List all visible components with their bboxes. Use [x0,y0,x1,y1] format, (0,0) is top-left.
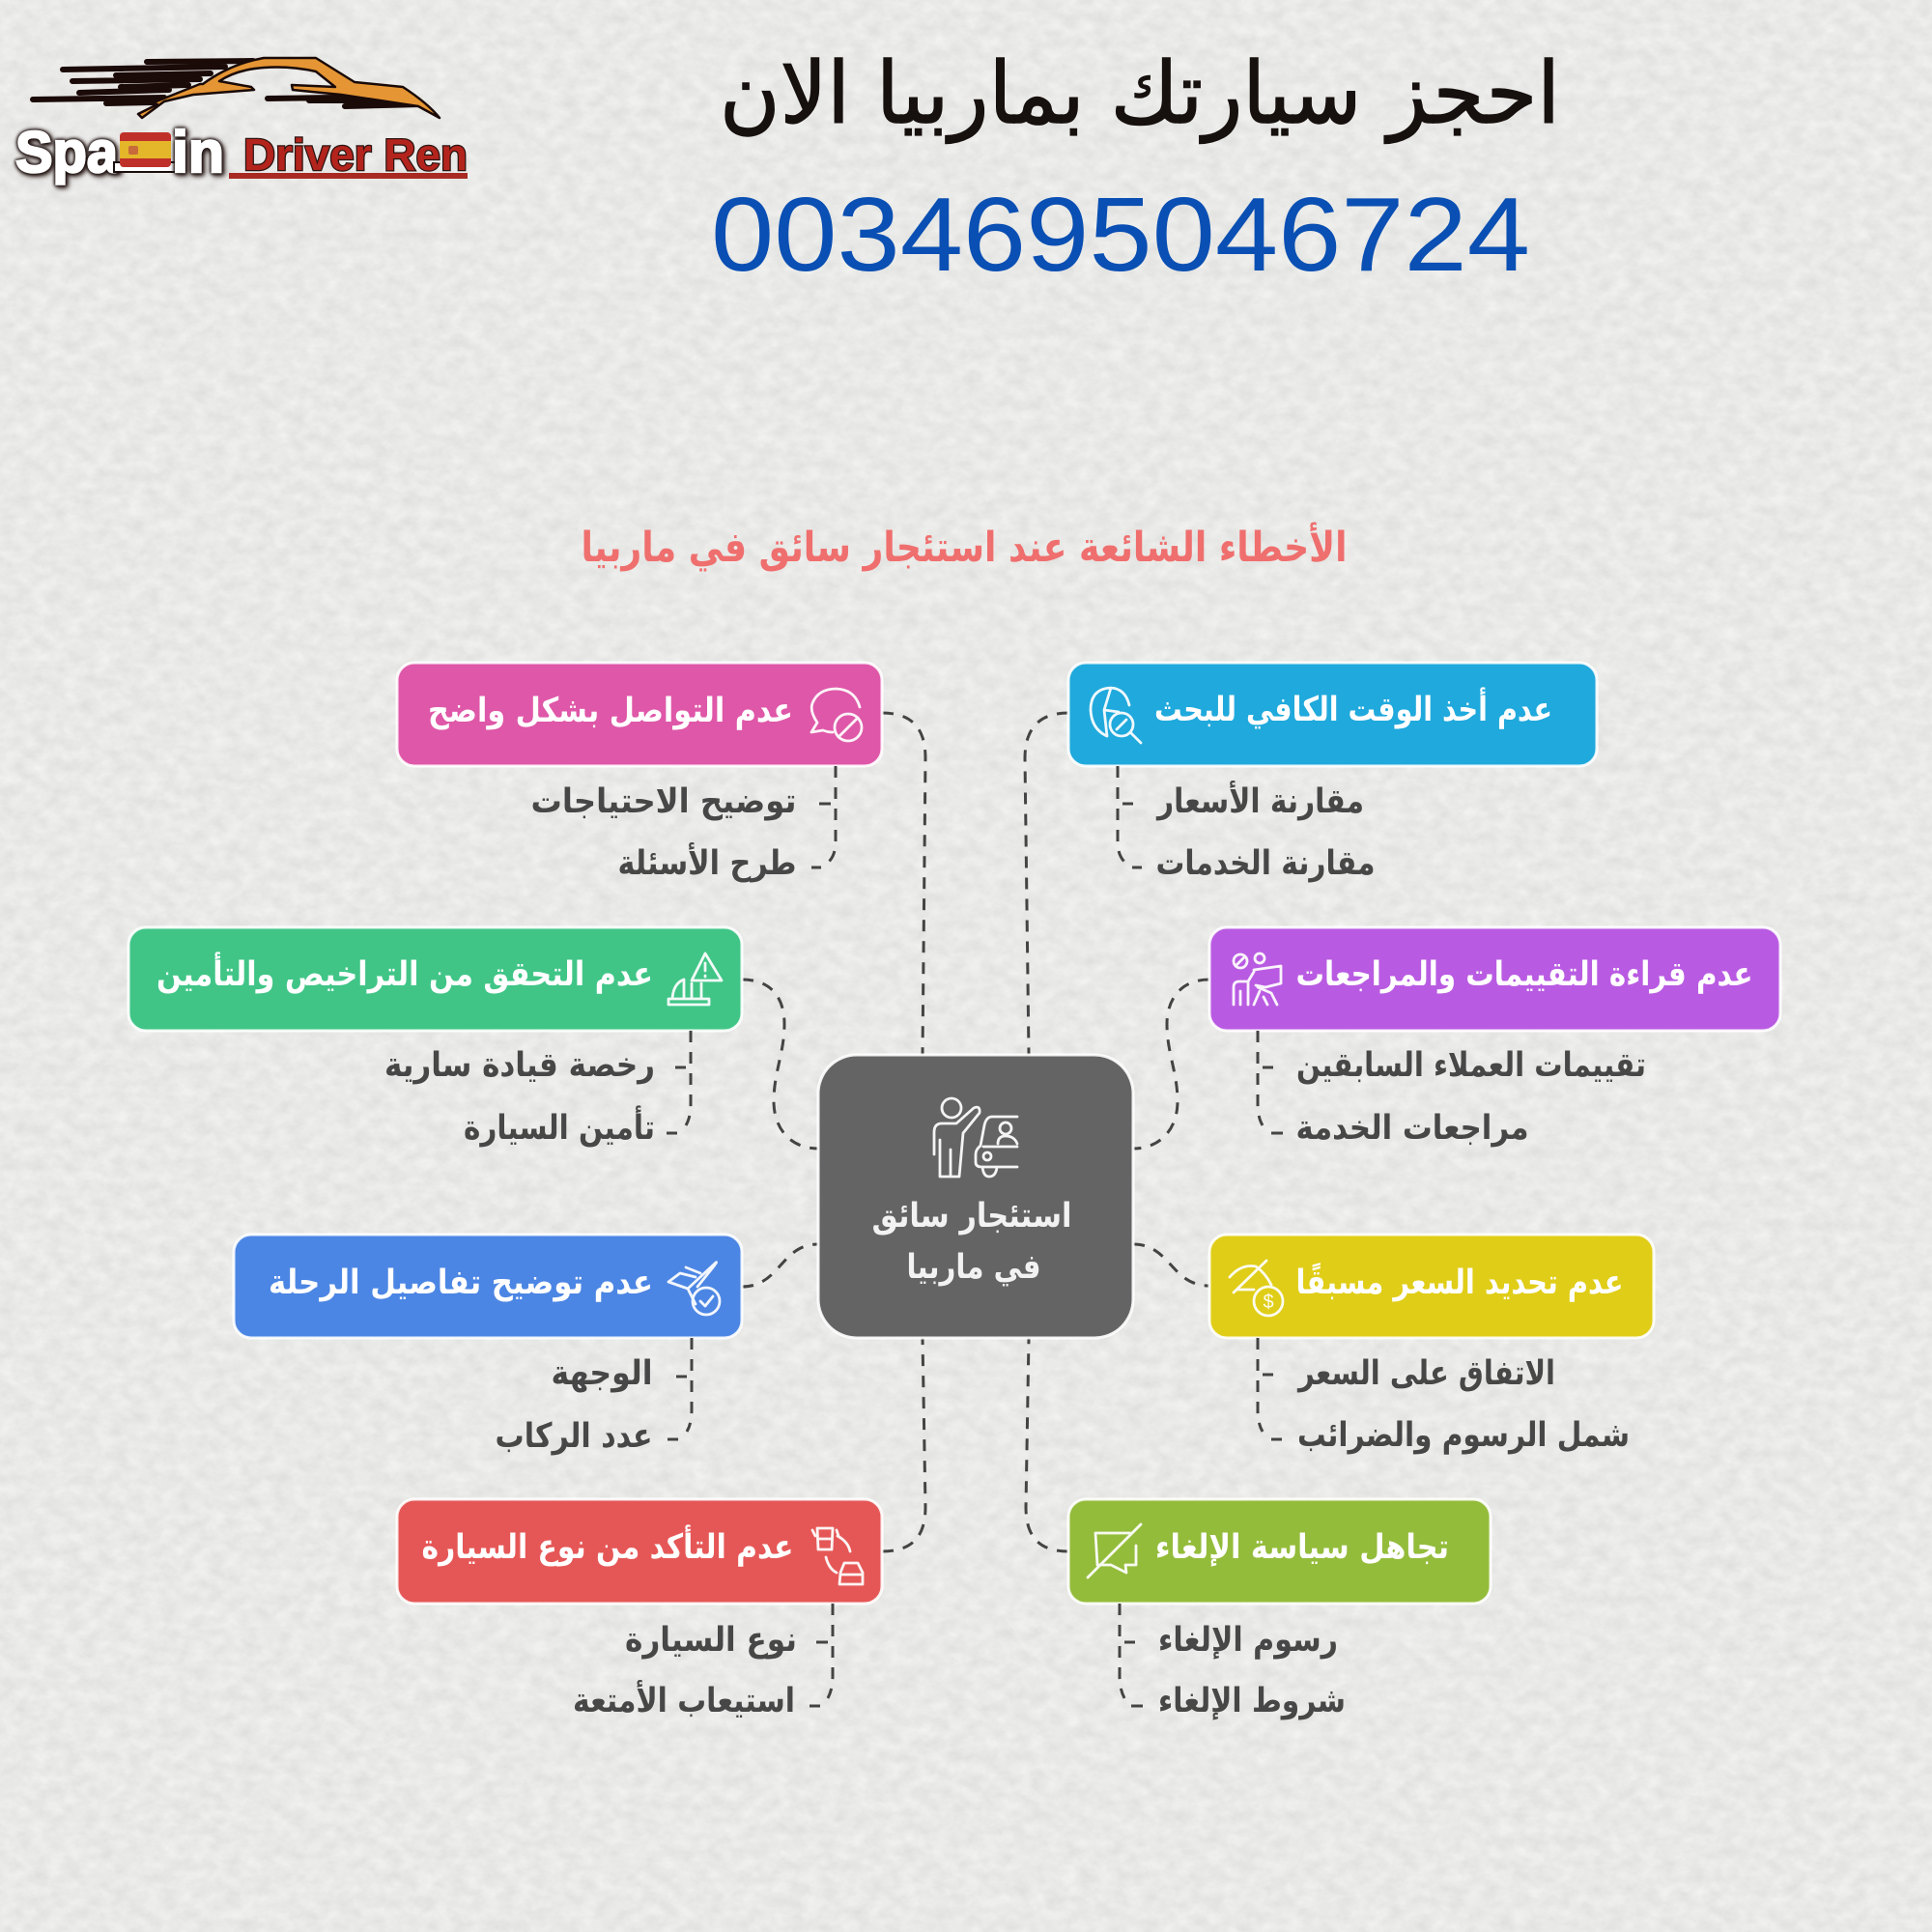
sub-list: reviews: تقييمات العملاء السابقين [1296,1046,1646,1085]
sub-list: cancellation [1120,1604,1346,1720]
panel: price not agreed [1209,1235,1654,1338]
card title: عدم التأكد من نوع السيارة [421,1524,794,1567]
panel: not reading reviews [1209,927,1780,1031]
panel: car type not confirmed [397,1499,882,1604]
icon: no price [1230,1261,1283,1316]
card title: تجاهل سياسة الإلغاء [1155,1528,1449,1567]
panel: not enough research time [1068,663,1597,766]
sub-list: reviews: مراجعات الخدمة [1296,1109,1528,1148]
card title: عدم أخذ الوقت الكافي للبحث [1154,687,1552,729]
icon: chart magnifier [1091,688,1141,743]
sub-list: trip details: الوجهة [551,1354,653,1393]
sub-list: poor communication [531,766,836,883]
heading: common mistakes: الأخطاء الشائعة عند استئجار سائق في ماربيا [582,522,1347,572]
panel: poor communication [397,663,882,766]
sub-list: poor communication: طرح الأسئلة [618,841,796,883]
title: book your car in Marbella: احجز سيارتك بماربيا الان [720,43,1560,144]
sub-list: licences [384,1031,691,1148]
sub-list: cancellation: رسوم الإلغاء [1158,1621,1338,1660]
center label: استئجار سائق [871,1197,1072,1236]
sub-list: licences: رخصة قيادة سارية [384,1046,655,1085]
panel: center node [818,1055,1133,1338]
icon: no price: $ [1263,1292,1274,1313]
logo word: Spain: Spa [15,120,119,185]
sub-list: car type: نوع السيارة [625,1621,797,1660]
center label [871,1197,1072,1287]
card title: عدم تحديد السعر مسبقًا [1296,1263,1623,1302]
logo word: Spain [15,120,224,185]
icon: speeding car [33,58,440,118]
sub-list: research [1118,766,1376,883]
logo: Spain Driver Rent [15,58,468,185]
icon: warning hat [668,953,722,1005]
sub-list: trip details: عدد الركاب [495,1417,653,1456]
sub-list: car type [573,1604,833,1720]
icon: plane with check [668,1263,720,1315]
panel: ignoring cancellation policy [1068,1499,1491,1604]
icon: person reviewing [1234,953,1281,1005]
card title: عدم قراءة التقييمات والمراجعات [1296,955,1752,994]
sub-list: cancellation: شروط الإلغاء [1158,1682,1346,1720]
center label: في ماربيا [906,1248,1041,1287]
icon: Spanish flag [120,132,171,167]
sub-list: price: شمل الرسوم والضرائب [1297,1416,1630,1455]
panel: licences and insurance [128,927,742,1031]
phone number: 0034695046724 [711,176,1530,294]
sub-list: price: الاتفاق على السعر [1296,1354,1555,1393]
sub-list: research: مقارنة الأسعار [1155,780,1364,821]
icon: blocked chat [811,689,862,741]
sub-list: car type: استيعاب الأمتعة [573,1679,795,1720]
sub-list: poor communication: توضيح الاحتياجات [531,782,796,821]
card title: عدم التحقق من التراخيص والتأمين [156,952,653,994]
logo word: Driver Ren: Driver Ren [243,129,468,180]
card title: عدم التواصل بشكل واضح [428,692,793,730]
panel: unclear trip details [234,1235,742,1338]
sub-list: trip details [495,1338,692,1456]
logo word: Spain: in [172,120,224,185]
icon: person hailing driver [934,1098,1017,1177]
connectors: center to cards [742,713,1209,1551]
sub-list: research: مقارنة الخدمات [1155,844,1376,883]
card title: عدم توضيح تفاصيل الرحلة [269,1264,653,1302]
sub-list: reviews [1258,1031,1646,1148]
sub-list: licences: تأمين السيارة [464,1105,655,1148]
sub-list: price [1258,1338,1630,1455]
icon: swap cars [812,1528,863,1584]
icon: crossed message [1088,1524,1141,1577]
